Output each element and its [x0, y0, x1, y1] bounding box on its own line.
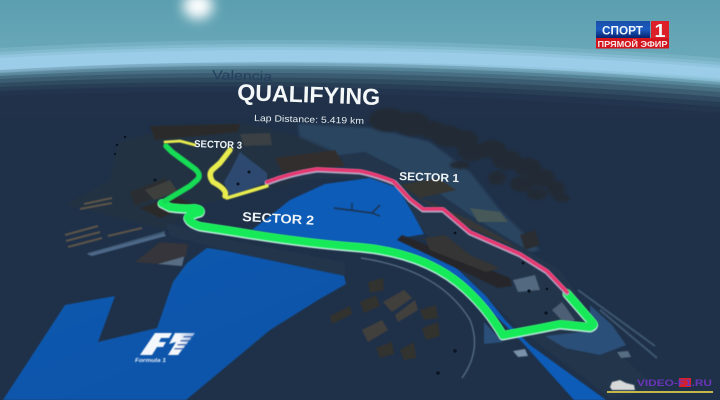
map: hairpin basin right — [545, 305, 626, 355]
map: lower buildings — [330, 278, 440, 360]
map: dock buildings row — [397, 178, 575, 325]
label: sector 1: SECTOR 1 — [399, 171, 460, 185]
map: upper land strip — [290, 152, 660, 398]
watermark — [607, 378, 713, 393]
Formula 1 wordmark: Formula 1 — [135, 358, 166, 364]
watermark red tag — [679, 378, 691, 387]
channel name: СПОРТ — [602, 24, 644, 38]
map: white platform pads — [158, 253, 631, 358]
racetrack — [162, 141, 594, 336]
map: marina jetty — [334, 203, 380, 216]
sector 2 track: green — [162, 146, 594, 336]
map: light blue square — [224, 152, 267, 197]
sector 3 track: yellow — [165, 141, 267, 198]
logo blue panel — [596, 21, 650, 38]
map: pier lines — [88, 232, 657, 358]
map: large lower-left water — [3, 248, 346, 400]
label: sector 2: SECTOR 2 — [242, 209, 315, 228]
map: bottom basin outline — [361, 258, 474, 378]
heading: location: Valencia — [212, 67, 273, 84]
F1 logo — [135, 333, 196, 364]
lower ground fill — [0, 118, 720, 400]
label: sector 3: SECTOR 3 — [194, 139, 243, 152]
watermark underline — [607, 391, 713, 393]
ground dark background with soft falloff — [0, 62, 720, 130]
watermark text: VIDEO-F1.RU — [637, 378, 712, 389]
channel number: 1 — [654, 21, 666, 41]
map: left piers and buildings — [65, 124, 345, 264]
map: lower peninsula edge — [165, 222, 345, 276]
sun glare — [183, 0, 213, 19]
heading: qualifying: QUALIFYING — [237, 79, 381, 110]
broadcaster logo — [596, 21, 669, 49]
sector 1 track: red — [267, 169, 567, 293]
map: trees clump — [369, 108, 570, 202]
logo red panel — [651, 21, 669, 38]
map: black markers — [114, 136, 548, 375]
watermark car icon — [610, 380, 635, 390]
map: shallow water region — [298, 124, 540, 260]
map: hairpin basin left — [484, 322, 503, 344]
logo red band — [596, 38, 669, 48]
horizon glow band — [0, 40, 720, 84]
F1 logo mark — [140, 333, 196, 355]
map: marina water — [252, 178, 606, 400]
map: peninsula left land — [65, 122, 340, 230]
sky background — [0, 0, 720, 130]
lap distance text: Lap Distance: 5.419 km — [254, 113, 364, 126]
live label: ПРЯМОЙ ЭФИР — [598, 38, 668, 49]
